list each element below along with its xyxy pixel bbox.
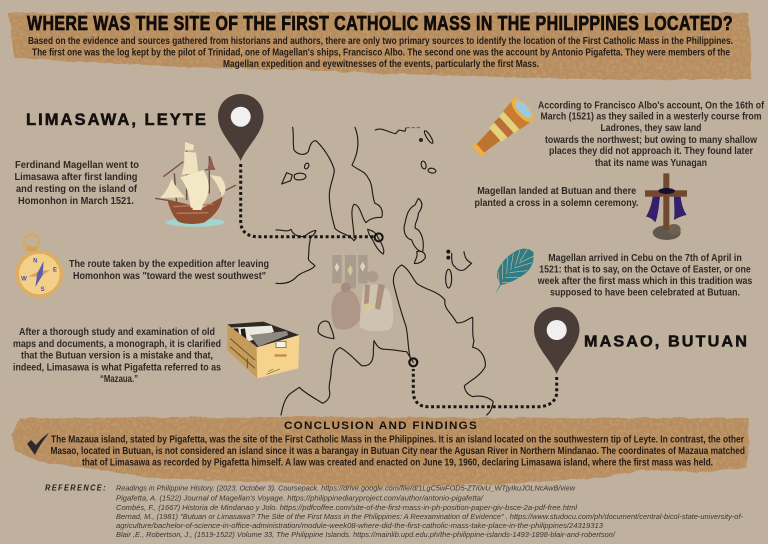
- dotted route to Masao pin: [413, 369, 557, 407]
- dotted route from Limasawa pin: [241, 164, 374, 237]
- text: route taken: Homonhon was "toward the west southwest": [73, 271, 266, 282]
- text: thorough study: “Mazaua.”: [100, 374, 138, 385]
- text: Cebu arrival: supposed to have been celebrated at Butuan.: [550, 288, 740, 298]
- intro text: [28, 36, 733, 70]
- icon: compass: S: [41, 287, 45, 293]
- pin: Limasawa: [218, 94, 264, 161]
- text: Francisco Albo's account: that its name was Yunagan: [595, 158, 707, 169]
- text: thorough study: indeed, Limasawa is what Pigafetta referred to as: [13, 362, 221, 373]
- map of islands: [276, 127, 493, 415]
- conclusion heading: CONCLUSION AND FINDINGS: [284, 420, 478, 432]
- text: Ferdinand Magellan: and resting on the island of: [16, 184, 138, 195]
- text: Francisco Albo's account: [538, 100, 765, 169]
- text: Magellan landed at Butuan: [474, 186, 639, 209]
- icon: compass: N: [33, 258, 37, 264]
- location heading: Masao, Butuan: MASAO, BUTUAN: [584, 334, 749, 351]
- icon: file drawer: [227, 322, 299, 378]
- icon: compass: E: [53, 268, 57, 274]
- conclusion text: [50, 434, 745, 468]
- icon: sailing ship: [155, 142, 236, 227]
- text: Magellan landed at Butuan: Magellan landed at Butuan and there: [477, 186, 637, 197]
- header torn paper banner: [9, 12, 752, 80]
- icon: telescope: [467, 94, 538, 163]
- text: route taken: [69, 259, 269, 282]
- icon: palm leaf: [495, 249, 534, 295]
- reference list: Bernad, M., (1981) "Butuan or Limasawa? The Site of the First Mass in the Philippines: A Reexamination of Evidence" . https://www.studocu.com/ph/document/central-bicol-state-university-of-: [116, 514, 744, 521]
- reference list: Pigafetta, A. (1522) Journal of Magellan's Voyage. https://philippinediaryproject.com/author/antonio-pigafetta/: [116, 496, 484, 502]
- reference list: Combés, F., (1667) Historia de Mindanao y Jolo. https://pdfcoffee.com/site-of-the-first-mass-in-ph-position-paper-giv-bsce-2a-pdf-free.html: [116, 505, 577, 512]
- conclusion torn paper banner: [12, 417, 749, 487]
- reference list: Readings in Philippine History. (2023, October 3). Coursepack. https://drive.google.com/file/d/1LgC5wFOD5-ZTi0vU_WTjyIkuJOLNcAwB/view: [116, 486, 576, 492]
- icon: compass: W: [21, 276, 27, 282]
- text: Cebu arrival: [537, 253, 753, 298]
- text: thorough study: maps and documents, a monograph, it is clarified: [13, 339, 221, 350]
- icon: cross with purple cloth: [645, 173, 687, 240]
- reference list: agriculture/bachelor-of-science-in-office-administration/module-week08-where-did-the-first-catholic-mass-take-place-in-the-philippines/24319313: [116, 523, 603, 530]
- icon: compass: [16, 234, 63, 298]
- text: route taken: The route taken by the expedition after leaving: [69, 259, 269, 270]
- text: thorough study: [13, 327, 221, 385]
- text: thorough study: that the Butuan version is a mistake and that,: [21, 351, 213, 362]
- text: Ferdinand Magellan: Homonhon in March 1521.: [18, 196, 134, 207]
- faded mass illustration: [331, 255, 393, 331]
- reference label: REFERENCE:: [45, 484, 107, 492]
- location heading: Limasawa, Leyte: LIMASAWA, LEYTE: [26, 111, 208, 129]
- pin: Masao: [534, 307, 580, 374]
- text: Ferdinand Magellan: Ferdinand Magellan went to: [15, 160, 139, 171]
- text: Magellan landed at Butuan: planted a cross in a solemn ceremony.: [474, 198, 639, 209]
- icon: check mark: [27, 433, 49, 455]
- text: thorough study: After a thorough study and examination of old: [19, 327, 215, 338]
- route ring marker: [409, 358, 417, 366]
- reference list: [116, 486, 744, 539]
- reference list: Blair ,E., Robertson, J., (1519-1522) Volume 33, The Philippine Islands. https://mainlib.upd.edu.ph/the-philippine-islands-1493-1898-blair-and-robertson/: [116, 532, 616, 539]
- text: Cebu arrival: Magellan arrived in Cebu on the 7th of April in: [548, 253, 742, 264]
- text: Ferdinand Magellan: Limasawa after first landing: [14, 172, 138, 183]
- intro text: Magellan expedition and eyewitnesses of the events, particularly the first Mass.: [223, 59, 539, 70]
- text: Francisco Albo's account: Ladrones, they saw land: [600, 123, 702, 134]
- text: Ferdinand Magellan: [14, 160, 139, 207]
